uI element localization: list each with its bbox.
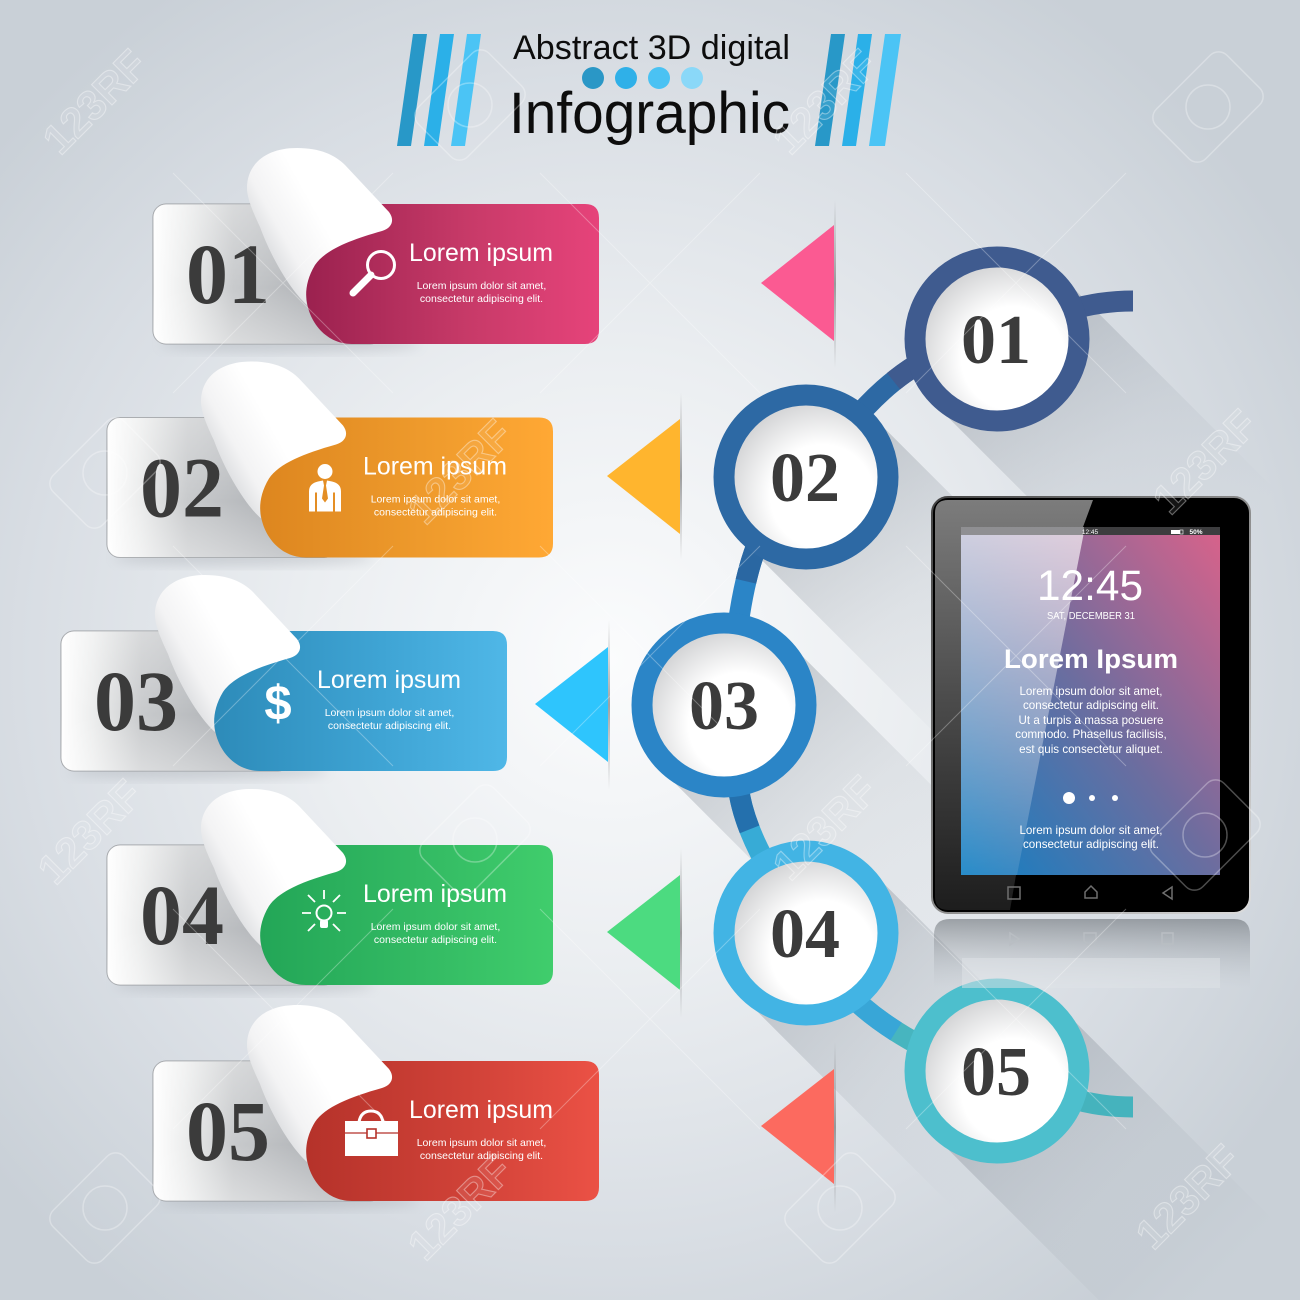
description: Lorem ipsum dolor sit amet, — [371, 921, 500, 933]
description: consectetur adipiscing elit. — [420, 293, 543, 305]
card 01 — [153, 148, 599, 352]
timeline circle 02: 02 — [770, 440, 840, 517]
screen footer: consectetur adipiscing elit. — [1023, 838, 1159, 851]
nav buttons — [1008, 886, 1172, 899]
heading: Lorem ipsum — [317, 666, 461, 694]
description — [325, 707, 454, 732]
description: consectetur adipiscing elit. — [328, 720, 451, 732]
watermark: 123RF — [399, 1147, 521, 1269]
triangle 02 — [607, 419, 680, 534]
description — [417, 280, 546, 305]
description: consectetur adipiscing elit. — [374, 506, 497, 518]
watermark: 123RF — [34, 41, 156, 163]
watermark: 123RF — [29, 771, 151, 893]
coloured label — [214, 631, 507, 771]
card 05 — [153, 1005, 599, 1209]
title block — [397, 29, 901, 146]
clock: 12:45 — [1037, 562, 1143, 610]
title dots — [582, 67, 703, 89]
number 01: 01 — [186, 226, 270, 322]
title right stripes — [815, 34, 901, 146]
coloured label — [260, 845, 553, 985]
description: consectetur adipiscing elit. — [420, 1150, 543, 1162]
screen paragraph — [1015, 685, 1167, 756]
description: Lorem ipsum dolor sit amet, — [417, 280, 546, 292]
screen heading: Lorem Ipsum — [1004, 644, 1178, 674]
screen paragraph: consectetur adipiscing elit. — [1023, 699, 1159, 712]
status bar text — [1082, 529, 1203, 536]
title left stripes — [397, 34, 481, 146]
watermark: 123RF — [1127, 1136, 1249, 1258]
number 03: 03 — [94, 653, 178, 749]
status bar text: 50% — [1189, 529, 1203, 536]
description: Lorem ipsum dolor sit amet, — [325, 707, 454, 719]
screen footer: Lorem ipsum dolor sit amet, — [1019, 824, 1163, 837]
card shadow — [68, 763, 328, 779]
triangle 01 — [761, 225, 834, 341]
screen paragraph: Lorem ipsum dolor sit amet, — [1019, 685, 1163, 698]
title line 2: Infographic — [509, 81, 790, 146]
screen paragraph: est quis consectetur aliquet. — [1019, 743, 1163, 756]
description — [371, 494, 500, 518]
watermark: 123RF — [399, 411, 521, 533]
paper curl — [201, 362, 346, 518]
card shadow — [160, 1193, 420, 1209]
number 05: 05 — [186, 1083, 270, 1179]
description — [417, 1137, 546, 1162]
long shadows of circles — [660, 275, 1287, 1300]
icon: magnifier — [353, 252, 394, 293]
timeline circle 04 — [724, 851, 888, 1015]
paper curl — [201, 789, 346, 946]
description: consectetur adipiscing elit. — [374, 934, 497, 946]
screen paragraph: Ut a turpis a massa posuere — [1018, 714, 1164, 727]
card shadow — [114, 550, 374, 566]
heading: Lorem ipsum — [363, 880, 507, 908]
pointer triangles — [535, 200, 836, 1212]
tablet body — [932, 497, 1250, 913]
triangle 05 — [761, 1069, 834, 1184]
watermark: 123RF — [764, 41, 886, 163]
timeline circle 05: 05 — [961, 1034, 1031, 1111]
card shadow — [160, 336, 420, 352]
number 02: 02 — [140, 440, 224, 536]
watermark: 123RF — [764, 767, 886, 889]
paper curl — [247, 1005, 392, 1162]
pager dots — [1063, 792, 1118, 804]
status bar text: 12:45 — [1082, 529, 1099, 536]
timeline circle 01 — [915, 257, 1079, 421]
paper curl — [155, 575, 300, 732]
grey number panel — [153, 1061, 383, 1201]
grey number panel — [107, 845, 337, 985]
triangle 03 — [535, 647, 608, 762]
heading: Lorem ipsum — [363, 452, 507, 480]
description: Lorem ipsum dolor sit amet, — [417, 1137, 546, 1149]
watermark: 123RF — [1144, 401, 1266, 523]
card shadow — [114, 977, 374, 993]
tablet reflection — [934, 919, 1250, 988]
description: Lorem ipsum dolor sit amet, — [371, 494, 500, 506]
coloured label — [260, 418, 553, 558]
timeline circle 03 — [642, 623, 806, 787]
heading: Lorem ipsum — [409, 1096, 553, 1124]
description — [371, 921, 500, 946]
grey number panel — [153, 204, 383, 344]
icon: lightbulb — [302, 890, 346, 931]
card 04 — [107, 789, 553, 993]
timeline circle 05 — [915, 989, 1079, 1153]
timeline circle 03: 03 — [689, 668, 759, 745]
screen paragraph: commodo. Phasellus facilisis, — [1015, 728, 1167, 741]
screen footer — [1019, 824, 1163, 851]
number 04: 04 — [140, 867, 224, 963]
timeline circle 04: 04 — [770, 896, 840, 973]
card 03 — [61, 575, 507, 779]
grey number panel — [61, 631, 291, 771]
icon: businessman — [309, 464, 341, 512]
triangle 04 — [607, 875, 680, 990]
date: SAT, DECEMBER 31 — [1047, 611, 1135, 622]
coloured label — [306, 1061, 599, 1201]
tablet screen — [961, 527, 1220, 875]
timeline circle 01: 01 — [961, 302, 1031, 379]
icon: dollar: $ — [264, 677, 292, 731]
icon: briefcase — [345, 1111, 398, 1156]
tablet — [932, 497, 1250, 988]
coloured label — [306, 204, 599, 344]
paper curl — [247, 148, 392, 305]
timeline circle 02 — [724, 395, 888, 559]
heading: Lorem ipsum — [409, 239, 553, 267]
grey number panel — [107, 418, 337, 558]
timeline connectors — [738, 301, 1133, 1107]
tablet bezel sheen — [935, 500, 1093, 910]
card 02 — [107, 362, 553, 566]
title line 1: Abstract 3D digital — [513, 29, 790, 67]
